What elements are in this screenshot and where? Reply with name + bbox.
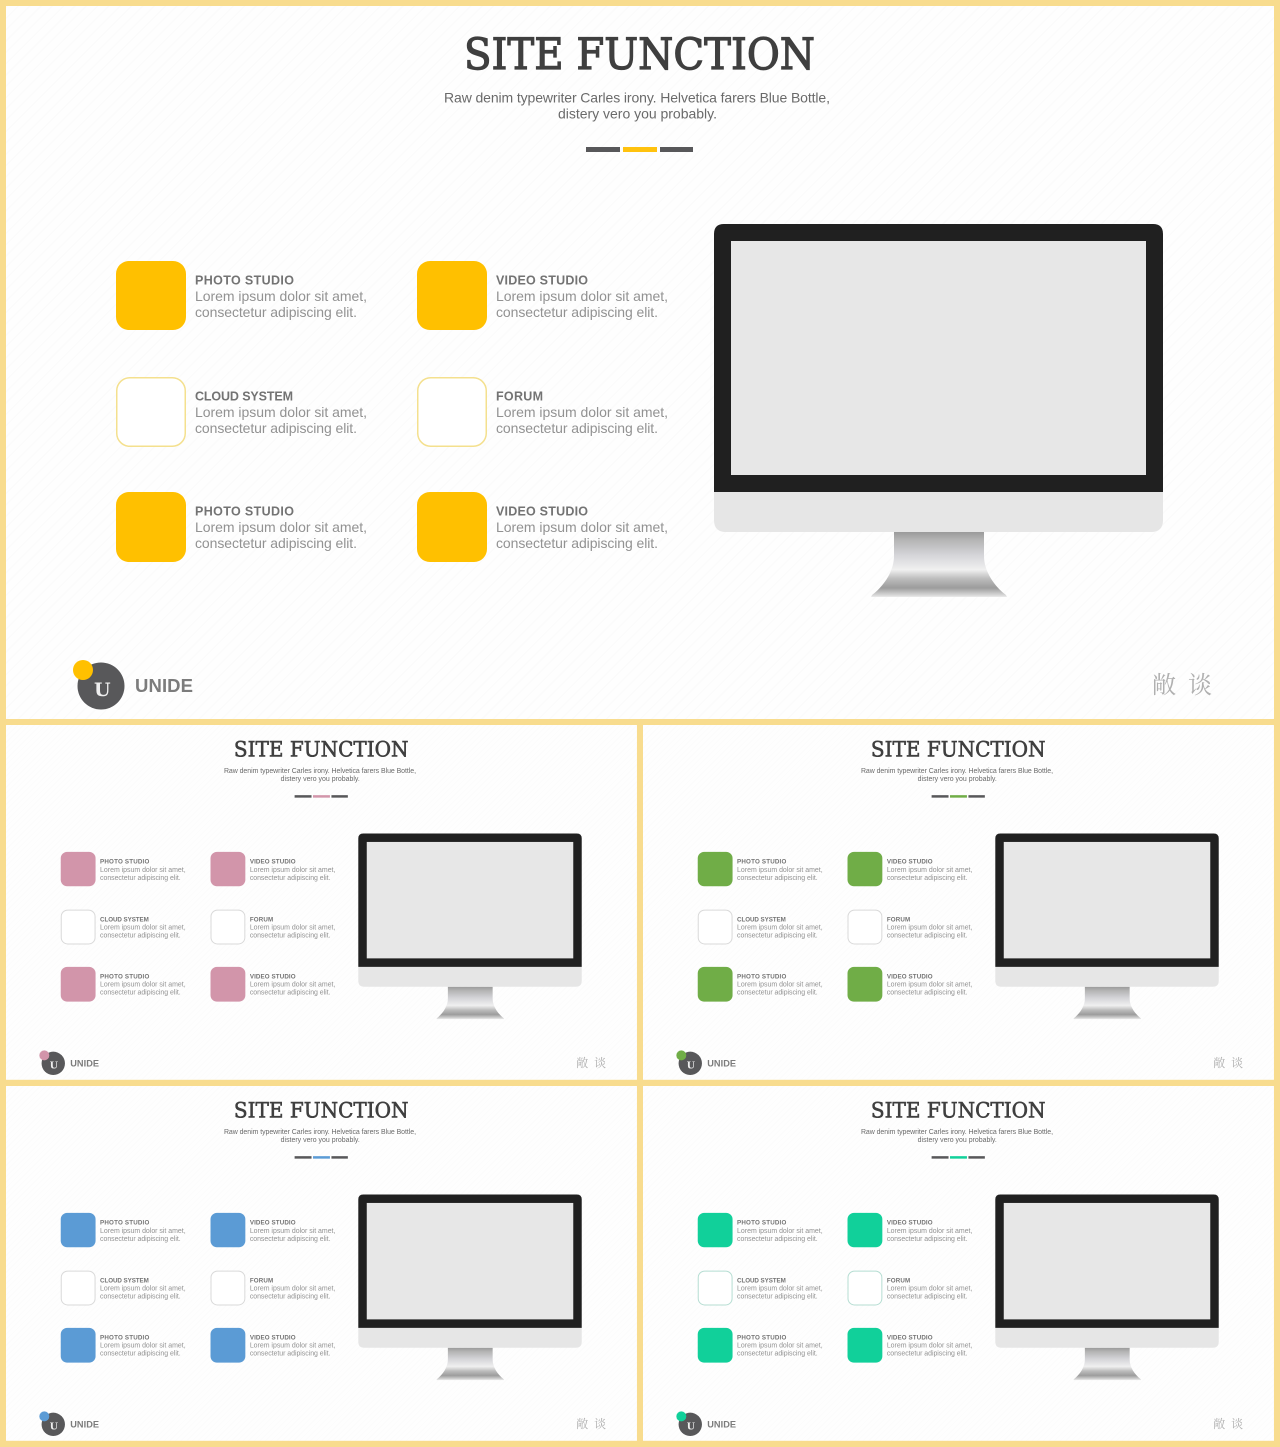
feature: forum: Lorem ipsum dolor sit amet, (250, 1286, 335, 1293)
feature: forum: consectetur adipiscing elit. (887, 1293, 967, 1300)
title: SITE FUNCTION (234, 1098, 409, 1123)
feature: photo studio lower: PHOTO STUDIO (737, 1335, 786, 1342)
logo: U (50, 1060, 59, 1071)
feature: video studio: Lorem ipsum dolor sit amet, (496, 288, 668, 304)
logo (39, 1050, 99, 1075)
brand mark chinese: 敞 (1213, 1055, 1225, 1070)
feature: photo studio lower (61, 967, 186, 1002)
feature: photo studio lower: PHOTO STUDIO (737, 974, 786, 981)
feature: photo studio: PHOTO STUDIO (737, 1220, 786, 1227)
feature: video studio lower: Lorem ipsum dolor sit amet, (887, 982, 972, 989)
panel: pink slide (6, 725, 637, 1080)
feature: video studio lower: VIDEO STUDIO (496, 504, 588, 518)
feature: photo studio lower: Lorem ipsum dolor sit amet, (195, 519, 367, 535)
feature: video studio lower: VIDEO STUDIO (887, 1335, 933, 1342)
feature: forum: FORUM (250, 916, 273, 923)
feature: photo studio: Lorem ipsum dolor sit amet, (737, 867, 823, 874)
logo: UNIDE (707, 1058, 736, 1068)
logo: UNIDE (707, 1419, 736, 1429)
feature: photo studio lower (698, 1328, 823, 1363)
feature: cloud system: consectetur adipiscing elit. (100, 1293, 181, 1300)
feature: photo studio lower: Lorem ipsum dolor sit amet, (737, 982, 823, 989)
feature: photo studio lower: Lorem ipsum dolor sit amet, (100, 1343, 186, 1350)
feature: forum: FORUM (887, 916, 910, 923)
feature: video studio lower: Lorem ipsum dolor sit amet, (887, 1343, 972, 1350)
feature: forum (211, 1271, 335, 1305)
feature: video studio lower (848, 1328, 972, 1363)
feature: video studio: Lorem ipsum dolor sit amet, (887, 867, 972, 874)
brand mark chinese: 敞 (576, 1055, 588, 1070)
feature: cloud system (61, 1271, 186, 1305)
feature: video studio lower: consectetur adipiscing elit. (887, 1351, 967, 1358)
feature: forum: consectetur adipiscing elit. (250, 932, 330, 939)
feature: photo studio lower: PHOTO STUDIO (100, 974, 149, 981)
feature: forum: consectetur adipiscing elit. (887, 932, 967, 939)
subtitle (861, 1129, 1053, 1144)
feature: cloud system: CLOUD SYSTEM (100, 916, 149, 923)
feature: photo studio: PHOTO STUDIO (100, 1220, 149, 1227)
feature: photo studio lower (61, 1328, 186, 1363)
feature: cloud system (61, 910, 186, 944)
feature: video studio lower: VIDEO STUDIO (250, 1335, 296, 1342)
feature: cloud system (117, 378, 367, 446)
monitor (995, 1194, 1219, 1380)
title: SITE FUNCTION (234, 737, 409, 762)
feature: video studio: Lorem ipsum dolor sit amet, (887, 1228, 972, 1235)
feature: video studio lower: VIDEO STUDIO (887, 974, 933, 981)
feature: photo studio: consectetur adipiscing elit. (100, 875, 181, 882)
feature: video studio: consectetur adipiscing elit. (250, 1236, 330, 1243)
subtitle (224, 768, 416, 783)
feature: cloud system: Lorem ipsum dolor sit amet, (100, 1286, 186, 1293)
monitor (995, 833, 1219, 1019)
feature: video studio: VIDEO STUDIO (887, 1220, 933, 1227)
feature: cloud system: consectetur adipiscing elit. (737, 932, 818, 939)
feature: photo studio (61, 852, 186, 886)
brand mark chinese: 敞 (1213, 1416, 1225, 1431)
feature: video studio lower: Lorem ipsum dolor sit amet, (496, 519, 668, 535)
logo (676, 1050, 736, 1075)
subtitle: distery vero you probably. (918, 1137, 997, 1144)
brand mark chinese: 敞 (1152, 672, 1176, 699)
subtitle: distery vero you probably. (281, 1137, 360, 1144)
feature: photo studio: consectetur adipiscing elit. (100, 1236, 181, 1243)
feature: forum: FORUM (250, 1277, 273, 1284)
feature: video studio lower: consectetur adipiscing elit. (250, 1351, 330, 1358)
subtitle (224, 1129, 416, 1144)
subtitle: Raw denim typewriter Carles irony. Helvetica farers Blue Bottle, (224, 768, 416, 775)
brand mark chinese: 敞 (576, 1416, 588, 1431)
feature: forum (418, 378, 668, 446)
feature: video studio (848, 1213, 972, 1247)
subtitle: distery vero you probably. (281, 776, 360, 783)
feature: photo studio: Lorem ipsum dolor sit amet, (100, 867, 186, 874)
feature: forum (848, 910, 972, 944)
panel: green slide (643, 725, 1274, 1080)
feature: forum: FORUM (887, 1277, 910, 1284)
feature: video studio: VIDEO STUDIO (250, 1220, 296, 1227)
brand mark chinese second: 谈 (1231, 1416, 1243, 1431)
feature: video studio: VIDEO STUDIO (250, 859, 296, 866)
feature: forum: consectetur adipiscing elit. (496, 420, 658, 436)
logo: UNIDE (70, 1419, 99, 1429)
feature: video studio (211, 1213, 335, 1247)
feature: photo studio: PHOTO STUDIO (195, 274, 294, 288)
feature: cloud system: consectetur adipiscing elit. (737, 1293, 818, 1300)
feature: photo studio lower: PHOTO STUDIO (100, 1335, 149, 1342)
feature: photo studio lower: Lorem ipsum dolor sit amet, (737, 1343, 823, 1350)
feature: cloud system: Lorem ipsum dolor sit amet, (100, 925, 186, 932)
title divider (932, 795, 985, 798)
title: SITE FUNCTION (871, 737, 1046, 762)
feature: forum: Lorem ipsum dolor sit amet, (887, 1286, 972, 1293)
feature: forum: Lorem ipsum dolor sit amet, (250, 925, 335, 932)
feature: video studio (417, 261, 668, 330)
subtitle: Raw denim typewriter Carles irony. Helvetica farers Blue Bottle, (224, 1129, 416, 1136)
feature: photo studio: consectetur adipiscing elit. (737, 1236, 818, 1243)
feature: video studio lower (211, 967, 335, 1002)
feature: cloud system: CLOUD SYSTEM (195, 390, 293, 404)
feature: cloud system: Lorem ipsum dolor sit amet, (195, 404, 367, 420)
feature: cloud system: Lorem ipsum dolor sit amet, (737, 925, 823, 932)
panel: blue slide (6, 1086, 637, 1441)
feature: photo studio lower (116, 492, 367, 562)
feature: photo studio lower: consectetur adipiscing elit. (100, 990, 181, 997)
feature: photo studio lower (698, 967, 823, 1002)
feature: photo studio: PHOTO STUDIO (100, 859, 149, 866)
feature: video studio lower (848, 967, 972, 1002)
feature: photo studio (698, 1213, 823, 1247)
feature: forum: consectetur adipiscing elit. (250, 1293, 330, 1300)
title divider (295, 795, 348, 798)
brand mark chinese second: 谈 (594, 1055, 606, 1070)
feature: video studio lower: Lorem ipsum dolor sit amet, (250, 1343, 335, 1350)
subtitle: Raw denim typewriter Carles irony. Helvetica farers Blue Bottle, (444, 90, 830, 106)
feature: video studio: consectetur adipiscing elit. (496, 304, 658, 320)
feature: photo studio: consectetur adipiscing elit. (195, 304, 357, 320)
feature: video studio: Lorem ipsum dolor sit amet, (250, 867, 335, 874)
feature: photo studio lower: Lorem ipsum dolor sit amet, (100, 982, 186, 989)
feature: video studio: consectetur adipiscing elit. (887, 875, 967, 882)
feature: photo studio: Lorem ipsum dolor sit amet, (195, 288, 367, 304)
feature: forum: FORUM (496, 390, 543, 404)
feature: video studio lower (417, 492, 668, 562)
monitor (358, 833, 582, 1019)
feature: video studio lower: VIDEO STUDIO (250, 974, 296, 981)
subtitle (444, 90, 830, 122)
title divider (295, 1156, 348, 1159)
logo: U (687, 1060, 696, 1071)
feature: photo studio (116, 261, 367, 330)
logo (73, 660, 193, 710)
feature: cloud system: CLOUD SYSTEM (737, 916, 786, 923)
feature: photo studio lower: consectetur adipiscing elit. (737, 1351, 818, 1358)
subtitle: Raw denim typewriter Carles irony. Helvetica farers Blue Bottle, (861, 768, 1053, 775)
feature: cloud system (698, 910, 823, 944)
subtitle: distery vero you probably. (558, 106, 717, 122)
logo: U (50, 1421, 59, 1432)
logo (39, 1411, 99, 1436)
feature: photo studio lower: PHOTO STUDIO (195, 504, 294, 518)
logo: U (94, 679, 111, 701)
brand mark chinese second: 谈 (1231, 1055, 1243, 1070)
panel: teal slide (643, 1086, 1274, 1441)
logo: U (687, 1421, 696, 1432)
feature: cloud system: consectetur adipiscing elit. (195, 420, 357, 436)
feature: video studio lower: consectetur adipiscing elit. (496, 535, 658, 551)
logo: UNIDE (70, 1058, 99, 1068)
feature: photo studio lower: consectetur adipiscing elit. (100, 1351, 181, 1358)
monitor (358, 1194, 582, 1380)
feature: cloud system: Lorem ipsum dolor sit amet, (737, 1286, 823, 1293)
feature: forum (848, 1271, 972, 1305)
feature: video studio (211, 852, 335, 886)
feature: video studio lower (211, 1328, 335, 1363)
panel: large yellow slide (6, 6, 1274, 719)
brand mark chinese second: 谈 (1188, 672, 1212, 699)
feature: photo studio: Lorem ipsum dolor sit amet, (737, 1228, 823, 1235)
feature: photo studio (698, 852, 823, 886)
subtitle: Raw denim typewriter Carles irony. Helvetica farers Blue Bottle, (861, 1129, 1053, 1136)
feature: photo studio: PHOTO STUDIO (737, 859, 786, 866)
monitor (714, 224, 1163, 597)
feature: cloud system: consectetur adipiscing elit. (100, 932, 181, 939)
logo (676, 1411, 736, 1436)
feature: video studio lower: Lorem ipsum dolor sit amet, (250, 982, 335, 989)
feature: photo studio lower: consectetur adipiscing elit. (195, 535, 357, 551)
feature: video studio lower: consectetur adipiscing elit. (887, 990, 967, 997)
subtitle: distery vero you probably. (918, 776, 997, 783)
brand mark chinese second: 谈 (594, 1416, 606, 1431)
feature: video studio: VIDEO STUDIO (496, 274, 588, 288)
feature: cloud system: CLOUD SYSTEM (737, 1277, 786, 1284)
feature: video studio lower: consectetur adipiscing elit. (250, 990, 330, 997)
feature: cloud system (698, 1271, 823, 1305)
logo: UNIDE (135, 675, 193, 696)
feature: photo studio: consectetur adipiscing elit. (737, 875, 818, 882)
title: SITE FUNCTION (464, 30, 815, 80)
feature: forum: Lorem ipsum dolor sit amet, (496, 404, 668, 420)
feature: photo studio (61, 1213, 186, 1247)
feature: video studio: VIDEO STUDIO (887, 859, 933, 866)
title: SITE FUNCTION (871, 1098, 1046, 1123)
feature: photo studio: Lorem ipsum dolor sit amet, (100, 1228, 186, 1235)
title divider (586, 147, 693, 152)
subtitle (861, 768, 1053, 783)
feature: video studio (848, 852, 972, 886)
feature: forum: Lorem ipsum dolor sit amet, (887, 925, 972, 932)
feature: video studio: Lorem ipsum dolor sit amet, (250, 1228, 335, 1235)
feature: video studio: consectetur adipiscing elit. (887, 1236, 967, 1243)
feature: photo studio lower: consectetur adipiscing elit. (737, 990, 818, 997)
title divider (932, 1156, 985, 1159)
feature: forum (211, 910, 335, 944)
feature: video studio: consectetur adipiscing elit. (250, 875, 330, 882)
feature: cloud system: CLOUD SYSTEM (100, 1277, 149, 1284)
